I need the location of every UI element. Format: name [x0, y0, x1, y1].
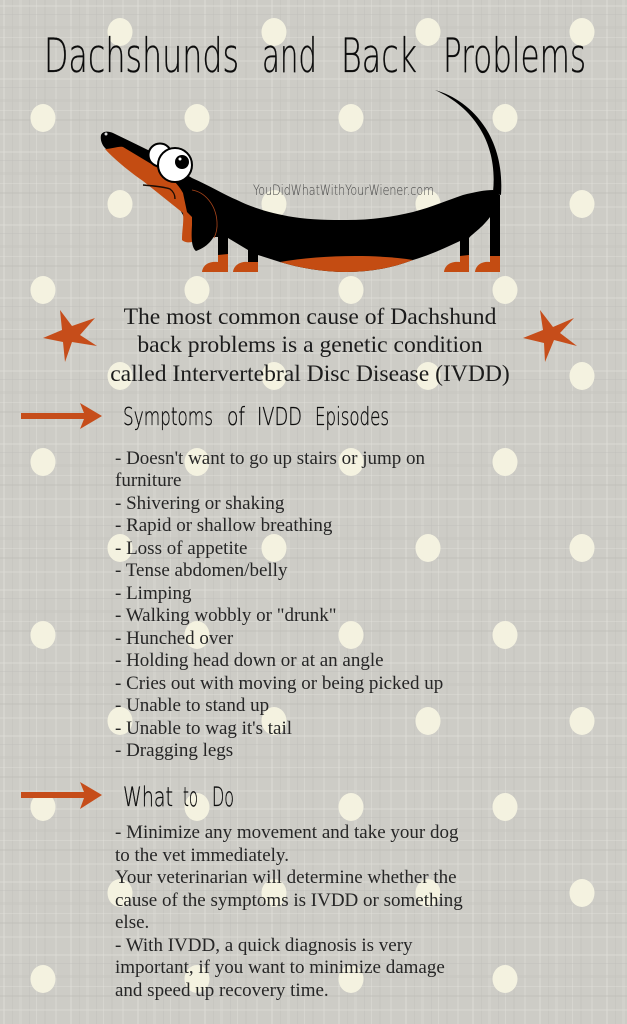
symptoms list: - Loss of appetite	[115, 538, 247, 559]
what to do text: important, if you want to minimize damage	[115, 957, 445, 978]
heading: what to do: to	[183, 782, 198, 813]
heading: symptoms: of	[227, 402, 245, 431]
icon: left star	[43, 310, 97, 362]
symptoms list: - Holding head down or at an angle	[115, 650, 384, 671]
illustration: dachshund	[101, 90, 501, 272]
heading: symptoms	[123, 402, 389, 431]
symptoms list: - Unable to wag it's tail	[115, 718, 292, 739]
intro text: back problems is a genetic condition	[137, 332, 483, 358]
title	[44, 29, 586, 84]
icon: right star	[523, 310, 577, 362]
symptoms list: - Hunched over	[115, 628, 234, 649]
mouth line	[143, 185, 175, 199]
tan belly	[280, 256, 413, 272]
heading: what to do: What	[123, 782, 173, 813]
symptoms list: - Dragging legs	[115, 740, 233, 761]
what to do text: - With IVDD, a quick diagnosis is very	[115, 935, 413, 956]
symptoms list: - Rapid or shallow breathing	[115, 515, 333, 536]
symptoms list: - Walking wobbly or "drunk"	[115, 605, 337, 626]
arrow: symptoms	[21, 403, 102, 429]
what to do text: and speed up recovery time.	[115, 980, 329, 1001]
symptoms list	[115, 448, 443, 761]
what to do text: cause of the symptoms is IVDD or something	[115, 890, 463, 911]
symptoms list: - Shivering or shaking	[115, 493, 285, 514]
heading: symptoms: IVDD	[257, 402, 302, 431]
what to do text: Your veterinarian will determine whether the	[115, 867, 457, 888]
tan paws	[202, 254, 500, 272]
what to do text: else.	[115, 912, 149, 933]
heading: what to do	[123, 782, 234, 813]
what to do text: - Minimize any movement and take your dog	[115, 822, 459, 843]
dog body	[101, 132, 500, 272]
what to do text	[115, 822, 463, 1001]
intro text	[110, 304, 510, 387]
intro text: The most common cause of Dachshund	[124, 304, 497, 330]
symptoms list: - Limping	[115, 583, 192, 604]
watermark: YouDidWhatWithYourWiener.com	[253, 183, 434, 199]
symptoms list: - Doesn't want to go up stairs or jump on	[115, 448, 426, 469]
arrow: what to do	[21, 782, 102, 809]
heading: symptoms: Episodes	[315, 402, 389, 431]
symptoms list: furniture	[115, 470, 181, 491]
tan muzzle	[105, 147, 192, 242]
title: Dachshunds	[44, 29, 239, 84]
symptoms list: - Unable to stand up	[115, 695, 269, 716]
symptoms list: - Cries out with moving or being picked up	[115, 673, 443, 694]
intro text: called Intervertebral Disc Disease (IVDD)	[110, 361, 510, 387]
heading: symptoms: Symptoms	[123, 402, 213, 431]
symptoms list: - Tense abdomen/belly	[115, 560, 288, 581]
title: Back	[341, 29, 417, 84]
eyes	[148, 144, 172, 166]
tail	[435, 90, 501, 195]
title: and	[262, 29, 317, 84]
what to do text: to the vet immediately.	[115, 845, 289, 866]
ear	[191, 190, 217, 251]
nose highlight	[104, 132, 108, 136]
heading: what to do: Do	[212, 782, 234, 813]
